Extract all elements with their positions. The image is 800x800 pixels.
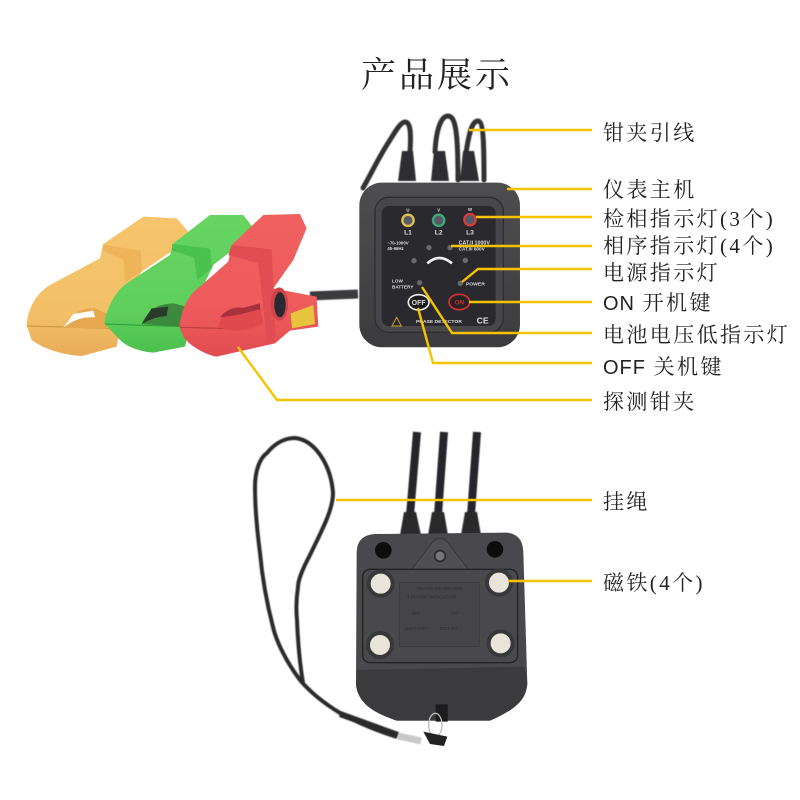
off button (408, 295, 429, 310)
panel text: POWER (466, 281, 485, 287)
main unit (359, 183, 520, 347)
labels: 仪表主机 (603, 178, 697, 202)
channel labels (404, 229, 474, 236)
labels: 电源指示灯 (603, 261, 720, 285)
clamp: green (104, 215, 252, 353)
unit body (359, 183, 520, 347)
faceplate (382, 206, 496, 326)
mounting holes (375, 542, 392, 559)
label panel: 3 PHASE INDICATOR (407, 594, 456, 600)
front cables (310, 116, 484, 296)
ratings: CAT.III 600V (459, 246, 486, 251)
channel labels: L2 (435, 229, 443, 236)
labels: 探测钳夹 (603, 390, 697, 414)
channel labels: L3 (466, 229, 474, 236)
back body (356, 533, 527, 721)
panel text: LOW (392, 279, 403, 284)
panel text: PHASE DETECTOR (416, 319, 462, 325)
panel text: BATTERY (392, 284, 414, 289)
strap ring (423, 704, 448, 746)
labels: 相序指示灯(4个) (603, 234, 775, 258)
ratings: CAT.II 1000V (459, 240, 490, 246)
sequence lamps (411, 245, 468, 286)
phase lamps (402, 214, 476, 226)
ratings: 45-66Hz (387, 246, 404, 251)
label panel: ISO (412, 611, 420, 617)
leader lines (238, 130, 592, 581)
back cables (400, 432, 481, 535)
back unit (356, 533, 527, 746)
warning icon (392, 317, 401, 326)
panel text (392, 279, 485, 325)
labels (603, 121, 790, 595)
clamps (27, 214, 318, 357)
warning label (291, 305, 315, 328)
ratings: ~70-1000V (387, 241, 409, 246)
label panel (399, 583, 479, 647)
on button (449, 294, 470, 310)
label panel: DC1.5V (440, 626, 458, 632)
main unit: U (406, 208, 410, 213)
magnets (368, 571, 513, 657)
main unit: W (468, 207, 473, 212)
lanyard (255, 438, 421, 741)
label panel: BATTERY (405, 626, 428, 632)
labels: OFF 关机键 (603, 355, 724, 379)
labels: 检相指示灯(3个) (603, 207, 775, 231)
recessed plate (363, 569, 518, 663)
on button: ON (455, 299, 464, 306)
lanyard tip (398, 736, 421, 741)
rotation arrow (427, 258, 452, 263)
off button: OFF (412, 300, 426, 307)
label panel: CE (452, 611, 459, 617)
pivot knob (271, 287, 288, 321)
labels: ON 开机键 (603, 291, 713, 315)
labels: 电池电压低指示灯 (603, 323, 790, 347)
ce mark: CE (477, 316, 489, 326)
clamp: red (179, 214, 318, 357)
labels: 钳夹引线 (603, 121, 697, 145)
main unit: V (437, 208, 440, 213)
label panel: PHASE DETECTOR (417, 586, 463, 592)
title: 产品展示 (361, 56, 513, 95)
screw (412, 538, 468, 569)
clamp: yellow (27, 217, 188, 356)
labels: 挂绳 (603, 490, 650, 514)
channel labels: L1 (404, 229, 412, 236)
labels: 磁铁(4个) (603, 571, 705, 595)
ratings (387, 240, 490, 251)
